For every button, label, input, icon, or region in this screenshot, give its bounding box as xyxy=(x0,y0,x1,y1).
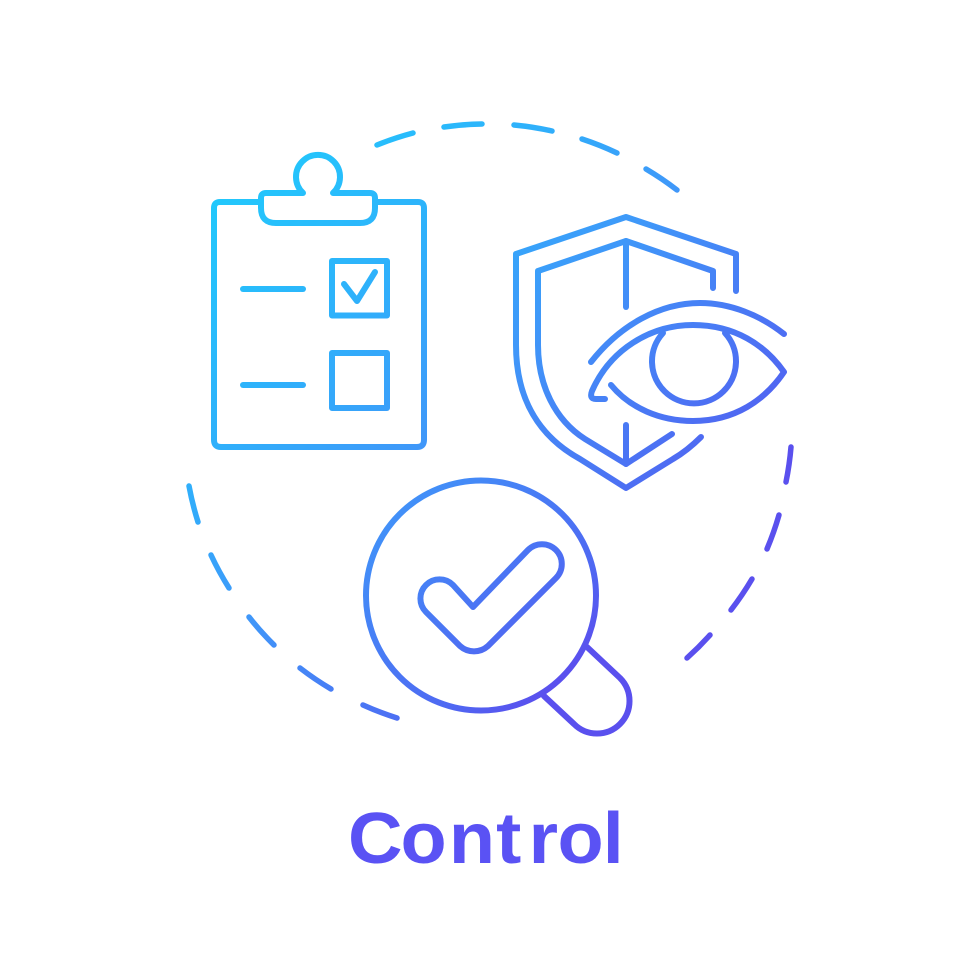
dashed circle ring xyxy=(189,124,791,718)
icon: clipboard checklist xyxy=(214,155,424,447)
iris xyxy=(652,333,736,403)
icon: shield xyxy=(516,217,736,488)
eye outline xyxy=(591,325,784,421)
lens xyxy=(366,480,596,710)
clipboard board xyxy=(214,202,424,447)
shield outer outline xyxy=(516,217,736,488)
eyebrow arc xyxy=(591,303,784,362)
icon: eye xyxy=(591,303,784,421)
checklist line two xyxy=(243,382,303,388)
handle xyxy=(544,647,630,734)
empty box xyxy=(332,353,387,408)
shield inner outline xyxy=(538,241,713,464)
check mark xyxy=(344,272,375,301)
checklist line one xyxy=(243,286,303,292)
clipboard clip xyxy=(261,155,375,223)
check mark outline xyxy=(420,544,562,651)
shield centre lower line xyxy=(623,425,629,464)
icon: magnifying glass with check xyxy=(366,480,630,734)
shield centre upper line xyxy=(623,241,629,307)
title: Control xyxy=(348,798,624,879)
checked box xyxy=(332,261,387,316)
